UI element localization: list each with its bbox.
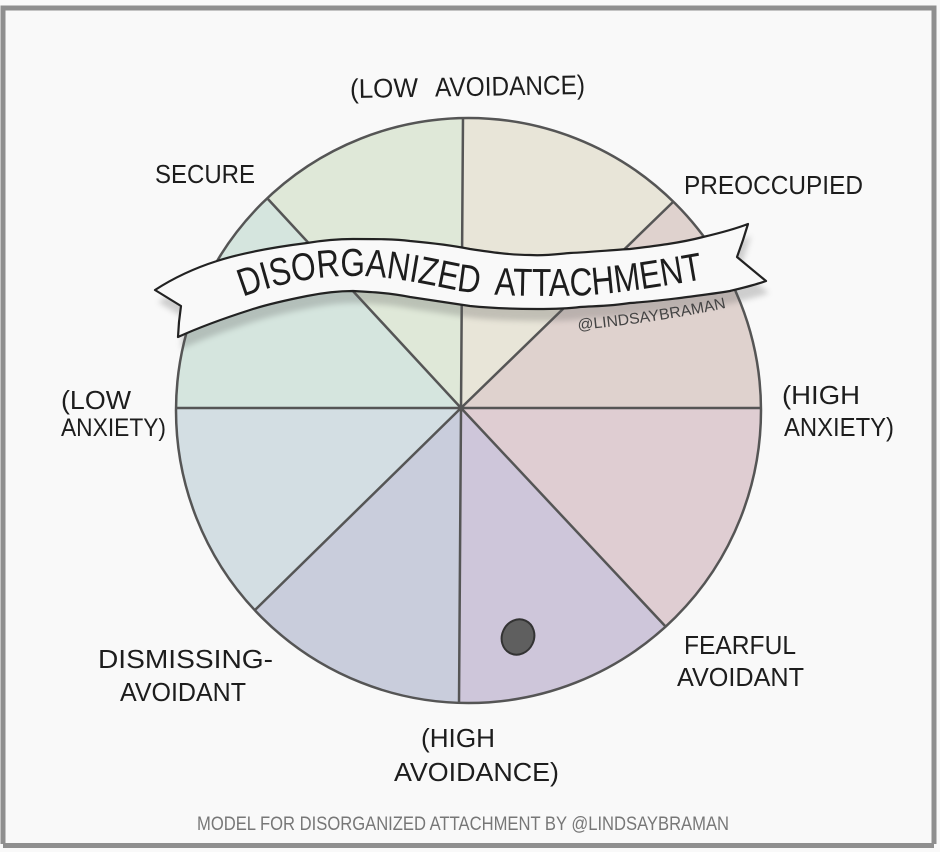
label: preoccupied: PREOCCUPIED <box>684 170 863 200</box>
label: low avoidance: AVOIDANCE) <box>435 70 585 103</box>
banner shadow <box>158 236 769 349</box>
label: low anxiety: (LOW <box>61 385 131 415</box>
sector: fearful avoidant <box>459 408 666 720</box>
label: high anxiety: (HIGH <box>782 380 860 410</box>
marker dot <box>496 614 540 660</box>
label: fearful avoidant: AVOIDANT <box>677 662 804 692</box>
label: high anxiety: ANXIETY) <box>784 412 894 442</box>
sector: low avoidance secure side <box>267 100 463 408</box>
label: low anxiety <box>61 385 166 442</box>
sector: preoccupied <box>464 204 760 407</box>
spokes <box>177 117 760 704</box>
sector: low avoidance preoccupied side <box>461 100 673 408</box>
sector: secure <box>160 198 461 408</box>
label: low anxiety: ANXIETY) <box>61 414 166 442</box>
wheel chart <box>174 116 762 704</box>
label: secure: SECURE <box>155 159 255 189</box>
circle outline <box>176 118 761 703</box>
label: high avoidance: AVOIDANCE) <box>394 757 559 787</box>
sector: low anxiety dismissing side <box>160 408 461 610</box>
frame bottom edge <box>0 844 940 852</box>
label: high anxiety <box>782 380 894 442</box>
label: low avoidance <box>350 70 585 104</box>
label: high avoidance: (HIGH <box>421 723 495 753</box>
label: fearful avoidant: FEARFUL <box>684 630 796 660</box>
sector: high avoidance dismissing side <box>256 411 460 702</box>
label: high avoidance <box>394 723 559 787</box>
label: dismissing-avoidant <box>98 644 273 707</box>
label: dismissing-avoidant: AVOIDANT <box>120 677 246 707</box>
footer credit: MODEL FOR DISORGANIZED ATTACHMENT BY @LINDSAYBRAMAN <box>197 814 729 835</box>
label: fearful avoidant <box>677 630 804 692</box>
credit handle: @LINDSAYBRAMAN <box>578 298 725 332</box>
sector: high anxiety <box>464 409 760 625</box>
label: dismissing-avoidant: DISMISSING- <box>98 644 273 674</box>
banner title: DISORGANIZED ATTACHMENT <box>236 248 699 296</box>
label: low avoidance: (LOW <box>350 73 419 104</box>
banner <box>154 222 768 338</box>
